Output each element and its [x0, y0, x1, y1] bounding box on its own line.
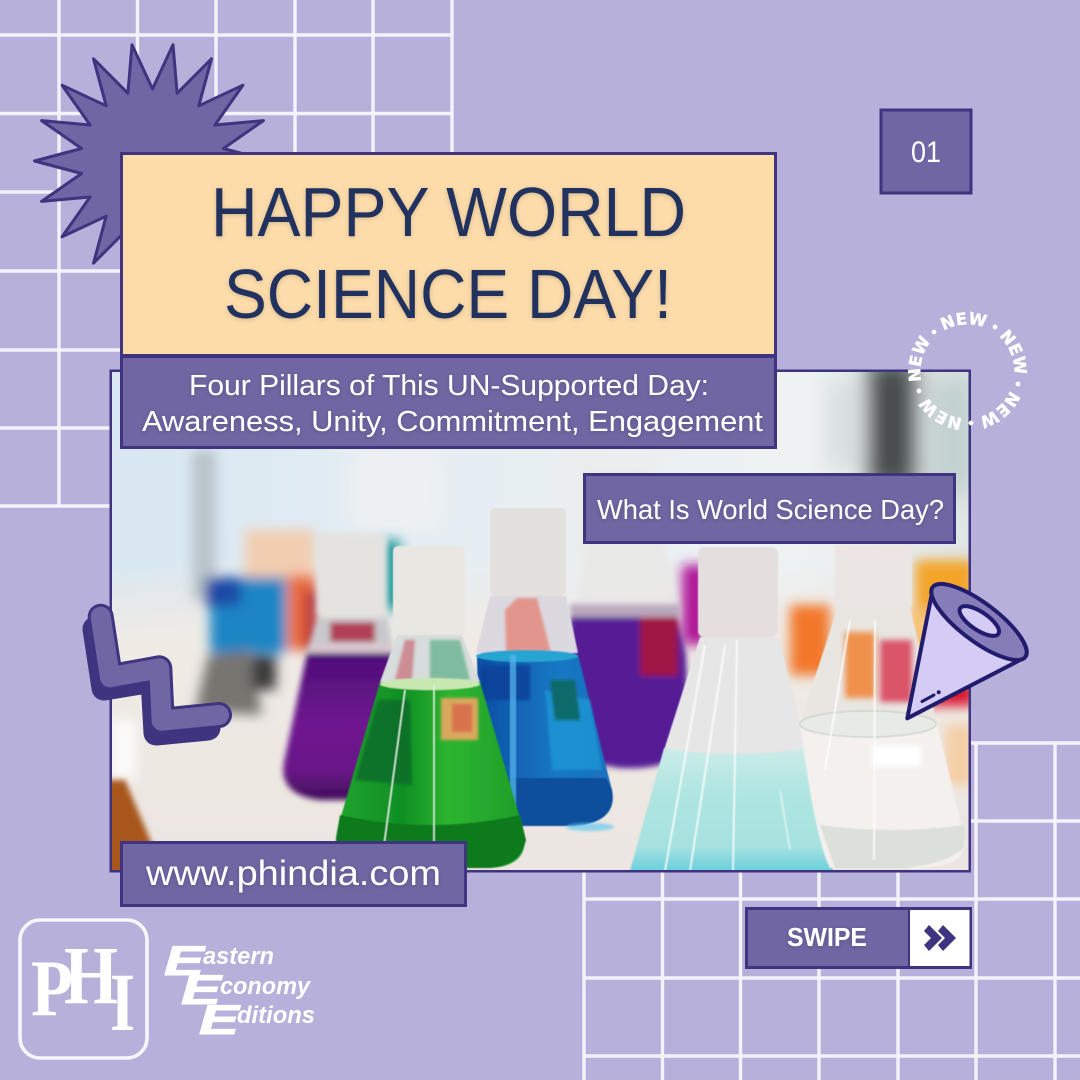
- zigzag front: [101, 617, 219, 721]
- Eastern Economy Editions logo: ditions: [237, 1002, 315, 1029]
- NEW circular badge: NEW: [908, 334, 930, 381]
- Eastern Economy Editions logo: conomy: [220, 973, 312, 1000]
- PHI logo: H: [64, 929, 118, 1021]
- PHI logo: P: [31, 945, 73, 1033]
- clear flask: [800, 545, 965, 868]
- website label: www.phindia.com: [145, 854, 441, 893]
- page number badge: 01: [911, 136, 941, 169]
- PHI logo: I: [110, 956, 135, 1048]
- zigzag ribbon: [95, 617, 219, 733]
- title line 1: HAPPY WORLD: [211, 173, 686, 251]
- icon: party cone: [907, 572, 1037, 718]
- NEW circular badge: NEW: [982, 392, 1020, 429]
- title panel: [122, 154, 776, 356]
- NEW circular badge: NEW: [918, 399, 962, 430]
- swipe button: [746, 908, 970, 968]
- Eastern Economy Editions logo: [164, 937, 315, 1043]
- Eastern Economy Editions logo: astern: [203, 943, 274, 970]
- NEW circular badge: [908, 312, 1028, 430]
- page number badge: [881, 110, 971, 193]
- icon: double chevron: [924, 925, 956, 951]
- dark purple flask (rear centre): [568, 588, 691, 773]
- website label: [122, 842, 466, 906]
- callout: what is world science day: What Is World Science Day?: [597, 494, 944, 525]
- grid pattern: bottom right: [584, 743, 1080, 1080]
- Eastern Economy Editions logo: E: [199, 996, 242, 1043]
- subtitle panel: [122, 356, 776, 448]
- PHI logo: [20, 920, 147, 1058]
- teal flask: [630, 547, 833, 871]
- Eastern Economy Editions logo: E: [181, 966, 224, 1013]
- swipe button: SWIPE: [787, 922, 867, 952]
- green flask: [336, 546, 526, 868]
- zigzag shadow: [95, 629, 208, 733]
- NEW circular badge: NEW: [1000, 329, 1028, 374]
- purple flask (rear left): [283, 533, 400, 800]
- grid pattern: top left: [0, 0, 452, 506]
- Eastern Economy Editions logo: E: [164, 937, 207, 984]
- NEW circular badge: NEW: [940, 312, 988, 330]
- subtitle line 1: Four Pillars of This UN-Supported Day:: [189, 370, 709, 402]
- photo: laboratory flasks: [105, 360, 975, 875]
- callout: what is world science day: [584, 474, 954, 542]
- blue flask: [476, 508, 614, 831]
- subtitle line 2: Awareness, Unity, Commitment, Engagement: [142, 406, 763, 438]
- title line 2: SCIENCE DAY!: [224, 255, 672, 333]
- starburst: [34, 45, 270, 277]
- background blurred objects: [356, 372, 968, 524]
